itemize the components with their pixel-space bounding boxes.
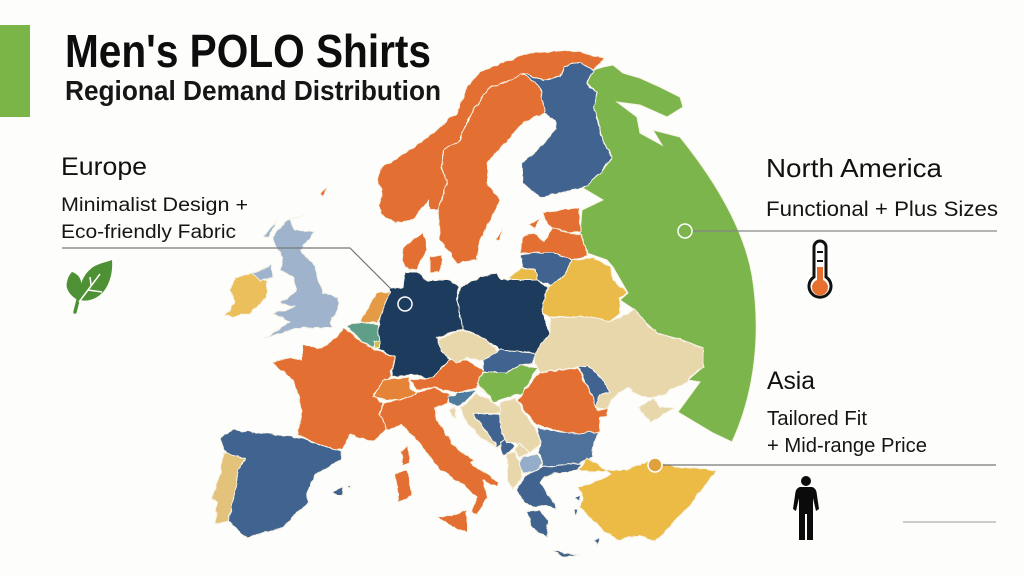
region: Romania (517, 368, 608, 433)
region: Hungary (477, 365, 538, 402)
region: Poland and Germany (377, 272, 550, 380)
map of Europe (212, 50, 717, 557)
callout line: North America (692, 230, 997, 232)
marker: Russia (678, 224, 692, 238)
decorative short line (903, 521, 996, 523)
region: Ireland (225, 273, 267, 317)
region: Switzerland (373, 377, 417, 400)
region: Kaliningrad (510, 268, 538, 280)
region: Belarus (542, 257, 628, 322)
marker: Turkey (648, 458, 662, 472)
region: Italy (380, 387, 498, 533)
subtitle: Regional Demand Distribution (65, 75, 441, 106)
text: Asia heading: Asia (767, 367, 815, 395)
text: Europe description: Eco-friendly Fabric (61, 222, 236, 243)
region: Croatia (449, 393, 502, 447)
icon: person (793, 476, 819, 540)
icon: thermometer (809, 241, 831, 297)
region: Portugal (212, 453, 245, 523)
region: Netherlands (360, 292, 390, 323)
text: Europe description: Minimalist Design + (61, 195, 248, 216)
region: Luxembourg (373, 340, 380, 348)
region: Crimea (638, 398, 675, 422)
text: Europe description (61, 195, 248, 243)
region: Ukraine (535, 310, 703, 408)
callout line: Europe (62, 248, 391, 289)
icon: leaf (67, 260, 112, 312)
region: North Macedonia (518, 455, 543, 473)
text: Asia description (767, 408, 927, 457)
region: Czechia (437, 330, 498, 363)
region: Moldova (578, 365, 610, 408)
region: UK (253, 215, 338, 338)
region: France (272, 327, 395, 450)
region: Baltic states (520, 208, 587, 285)
title: Men's POLO Shirts (65, 25, 431, 77)
text: North America description: Functional + Plus Sizes (766, 198, 998, 221)
green accent bar (0, 25, 30, 117)
text: North America heading: North America (766, 153, 943, 183)
region: Serbia, Kosovo and Albania (500, 398, 542, 490)
region: Russia (580, 65, 756, 442)
region: Slovenia (448, 390, 477, 407)
region: Spain (220, 430, 352, 538)
region: Slovakia (483, 350, 535, 372)
text: Europe heading: Europe (61, 153, 147, 181)
text: Asia description: + Mid-range Price (767, 435, 927, 457)
callout line: Asia (663, 464, 996, 466)
region: Greece (517, 463, 600, 557)
region: Belgium (347, 322, 380, 348)
region: Turkey (577, 458, 717, 542)
region: Bosnia and Montenegro (472, 413, 515, 457)
region: Finland (522, 62, 612, 198)
text: Asia description: Tailored Fit (767, 408, 867, 430)
marker: Germany (398, 297, 412, 311)
region: Bulgaria (537, 428, 600, 467)
region: Austria (410, 360, 483, 393)
region: Scandinavia (320, 50, 605, 273)
